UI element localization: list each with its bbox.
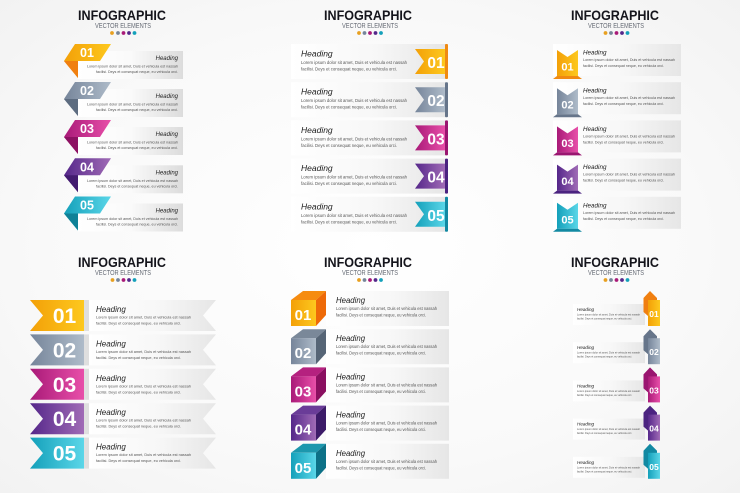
row 01: 01	[53, 305, 76, 328]
row 01: Heading	[156, 56, 179, 62]
row 05: 05	[53, 443, 76, 466]
row 01: 01	[427, 55, 445, 72]
row 01	[291, 291, 449, 326]
row 02	[64, 82, 183, 117]
row 05	[291, 444, 449, 479]
row 02	[291, 329, 449, 364]
row 04: Lorem ipsum dolor sit amet, Duis et vehicula est nassah	[336, 421, 438, 426]
row 04: Lorem ipsum dolor sit amet, Duis et vehicula est nassah	[583, 173, 675, 177]
row 02: 02	[53, 339, 76, 362]
row 01: 01	[649, 309, 659, 319]
row 04: facilisi. Deys et consequat neque, eu vehicula orci.	[577, 431, 632, 435]
row 03: Heading	[577, 383, 595, 388]
row 01: Heading	[583, 50, 607, 56]
row 02: Heading	[336, 334, 366, 343]
panel: infographic 4 (bottom left)	[30, 254, 216, 469]
panel: infographic 3 (top right)	[553, 7, 681, 232]
row 03: Heading	[156, 132, 179, 138]
row 05: Heading	[336, 449, 366, 458]
row 02: 02	[649, 347, 659, 357]
row 04: 04	[80, 160, 94, 174]
row 04	[30, 403, 216, 434]
row 01	[30, 300, 216, 331]
row 01: Lorem ipsum dolor sit amet, Duis et vehicula est nassah	[96, 314, 191, 320]
row 05	[64, 196, 183, 232]
row 05: Heading	[301, 201, 333, 211]
title 4: VECTOR ELEMENTS	[95, 270, 151, 277]
row 01: facilisi. Deys et consequat neque, eu vehicula orci.	[577, 316, 632, 320]
row 04: Lorem ipsum dolor sit amet, Duis et vehicula est nassah	[301, 175, 408, 180]
row 03: facilisi. Deys et consequat neque, eu vehicula orci.	[301, 143, 397, 148]
row 01: Heading	[577, 307, 595, 312]
row 03: Lorem ipsum dolor sit amet, Duis et vehicula est nassah	[96, 383, 191, 388]
row 02: Lorem ipsum dolor sit amet, Duis et vehicula est nassah	[577, 351, 640, 355]
row 05	[30, 438, 216, 469]
title 6: VECTOR ELEMENTS	[588, 270, 644, 277]
panel: infographic 1 (top left)	[64, 7, 183, 232]
row 05: Lorem ipsum dolor sit amet, Duis et vehicula est nassah	[583, 211, 675, 215]
row 03	[64, 120, 183, 155]
row 01: Lorem ipsum dolor sit amet, Duis et vehicula est nassah	[583, 58, 675, 62]
row 05	[553, 197, 681, 232]
row 01	[291, 44, 448, 79]
row 02: facilisi. Deys et consequat neque, eu vehicula orci.	[96, 108, 178, 112]
row 04: facilisi. Deys et consequat neque, eu vehicula orci.	[301, 181, 397, 186]
row 01	[553, 44, 681, 79]
row 01	[64, 44, 183, 79]
row 03: 03	[649, 385, 659, 395]
row 02: Heading	[301, 87, 333, 97]
row 02: facilisi. Deys et consequat neque, eu vehicula orci.	[577, 355, 632, 359]
title 2: INFOGRAPHIC	[324, 7, 412, 23]
row 03: facilisi. Deys et consequat neque, eu vehicula orci.	[96, 146, 178, 150]
row 04: Heading	[577, 422, 595, 427]
row 04	[553, 159, 681, 194]
row 05: facilisi. Deys et consequat neque, eu vehicula orci.	[336, 465, 426, 470]
row 05: Heading	[577, 460, 595, 465]
row 03: Lorem ipsum dolor sit amet, Duis et vehicula est nassah	[577, 389, 640, 393]
row 02: Lorem ipsum dolor sit amet, Duis et vehicula est nassah	[96, 349, 191, 354]
row 02: 02	[295, 345, 311, 362]
row 03	[291, 120, 448, 155]
title 3: VECTOR ELEMENTS	[588, 23, 644, 30]
row 05: 05	[80, 198, 94, 212]
row 01: 01	[561, 62, 574, 74]
title 1: VECTOR ELEMENTS	[95, 23, 151, 30]
row 05: Lorem ipsum dolor sit amet, Duis et vehicula est nassah	[301, 213, 408, 218]
row 03: Heading	[301, 125, 333, 135]
row 05: Heading	[156, 208, 179, 214]
row 01: facilisi. Deys et consequat neque, eu vehicula orci.	[96, 320, 181, 326]
row 02: facilisi. Deys et consequat neque, eu vehicula orci.	[96, 355, 181, 360]
row 04	[291, 406, 449, 441]
row 03: 03	[80, 122, 94, 136]
row 03	[553, 120, 681, 155]
row 04: facilisi. Deys et consequat neque, eu vehicula orci.	[583, 179, 664, 183]
row 03: Heading	[336, 372, 366, 381]
row 05: facilisi. Deys et consequat neque, eu vehicula orci.	[96, 222, 178, 226]
row 02: 02	[427, 93, 445, 110]
row 02: Lorem ipsum dolor sit amet, Duis et vehicula est nassah	[87, 102, 178, 106]
row 04	[64, 158, 183, 193]
row 02: Heading	[156, 94, 179, 100]
row 03	[291, 367, 449, 402]
title 3: INFOGRAPHIC	[571, 7, 659, 23]
row 02: facilisi. Deys et consequat neque, eu vehicula orci.	[336, 351, 426, 356]
title 6	[571, 254, 659, 282]
row 05: 05	[427, 208, 445, 225]
title 1: INFOGRAPHIC	[78, 7, 166, 23]
title 2: VECTOR ELEMENTS	[342, 23, 398, 30]
row 04: Lorem ipsum dolor sit amet, Duis et vehicula est nassah	[577, 427, 640, 431]
row 03	[30, 369, 216, 400]
row 03: Heading	[583, 126, 607, 133]
row 02: Lorem ipsum dolor sit amet, Duis et vehicula est nassah	[301, 98, 408, 103]
row 02: Lorem ipsum dolor sit amet, Duis et vehicula est nassah	[336, 344, 438, 349]
row 01: Heading	[301, 48, 333, 58]
row 01: 01	[295, 307, 311, 324]
row 04	[573, 406, 660, 441]
row 05: facilisi. Deys et consequat neque, eu vehicula orci.	[301, 219, 397, 224]
row 04: facilisi. Deys et consequat neque, eu vehicula orci.	[96, 424, 181, 429]
row 03: Lorem ipsum dolor sit amet, Duis et vehicula est nassah	[301, 136, 408, 141]
row 03	[573, 367, 660, 402]
row 03: Lorem ipsum dolor sit amet, Duis et vehicula est nassah	[336, 382, 438, 387]
row 02	[30, 334, 216, 365]
row 04: Heading	[301, 163, 333, 173]
row 01: Lorem ipsum dolor sit amet, Duis et vehicula est nassah	[336, 306, 438, 311]
row 05: Heading	[96, 443, 126, 452]
row 05: Heading	[583, 202, 607, 209]
row 01: 01	[80, 46, 94, 60]
row 01: Lorem ipsum dolor sit amet, Duis et vehicula est nassah	[87, 64, 178, 68]
row 05: facilisi. Deys et consequat neque, eu vehicula orci.	[96, 458, 181, 463]
row 02: 02	[561, 100, 574, 112]
row 01: facilisi. Deys et consequat neque, eu vehicula orci.	[96, 70, 178, 74]
row 02: Heading	[577, 345, 595, 350]
row 04: 04	[561, 176, 574, 188]
row 04: 04	[53, 408, 76, 431]
row 04: facilisi. Deys et consequat neque, eu vehicula orci.	[96, 184, 178, 188]
row 05: 05	[295, 460, 311, 477]
row 02	[291, 82, 448, 117]
row 01: Heading	[336, 296, 366, 305]
row 04: Heading	[336, 411, 366, 420]
panel: infographic 2 (top centre)	[291, 7, 448, 232]
row 05: Lorem ipsum dolor sit amet, Duis et vehicula est nassah	[336, 459, 438, 464]
row 05: Lorem ipsum dolor sit amet, Duis et vehicula est nassah	[87, 217, 178, 221]
row 03: facilisi. Deys et consequat neque, eu vehicula orci.	[583, 140, 664, 144]
row 03: Heading	[96, 374, 126, 383]
row 05: facilisi. Deys et consequat neque, eu vehicula orci.	[577, 469, 632, 473]
row 03: 03	[561, 138, 574, 150]
row 02	[553, 82, 681, 117]
row 03: facilisi. Deys et consequat neque, eu vehicula orci.	[336, 389, 426, 394]
row 05: facilisi. Deys et consequat neque, eu vehicula orci.	[583, 217, 664, 221]
row 02: 02	[80, 84, 94, 98]
row 03: Lorem ipsum dolor sit amet, Duis et vehicula est nassah	[583, 134, 675, 138]
title 6: INFOGRAPHIC	[571, 254, 659, 270]
row 03: 03	[295, 383, 311, 400]
row 05: Lorem ipsum dolor sit amet, Duis et vehicula est nassah	[96, 452, 191, 457]
row 04: Heading	[156, 170, 179, 176]
row 03: 03	[427, 131, 445, 148]
row 04: Heading	[583, 164, 607, 171]
row 04: 04	[427, 170, 445, 187]
title 4	[78, 254, 166, 282]
row 04: Lorem ipsum dolor sit amet, Duis et vehicula est nassah	[96, 418, 191, 423]
title 5: VECTOR ELEMENTS	[342, 270, 398, 277]
title 4: INFOGRAPHIC	[78, 254, 166, 270]
title 2	[324, 7, 412, 35]
title 3	[571, 7, 659, 35]
row 03: facilisi. Deys et consequat neque, eu vehicula orci.	[96, 389, 181, 394]
title 1	[78, 7, 166, 35]
row 04: 04	[649, 424, 659, 434]
row 05: 05	[561, 214, 574, 226]
row 02: facilisi. Deys et consequat neque, eu vehicula orci.	[301, 105, 397, 110]
title 5: INFOGRAPHIC	[324, 254, 412, 270]
title 5	[324, 254, 412, 282]
row 03: 03	[53, 374, 76, 397]
row 02: Heading	[96, 339, 126, 348]
row 02: Heading	[583, 88, 607, 95]
panel: infographic 5 (bottom centre)	[291, 254, 449, 479]
row 05	[291, 197, 448, 232]
row 05: Lorem ipsum dolor sit amet, Duis et vehicula est nassah	[577, 465, 640, 469]
row 01: facilisi. Deys et consequat neque, eu vehicula orci.	[301, 66, 397, 72]
row 03: Lorem ipsum dolor sit amet, Duis et vehicula est nassah	[87, 140, 178, 144]
row 05: 05	[649, 462, 659, 472]
row 02	[573, 329, 660, 364]
row 04: Lorem ipsum dolor sit amet, Duis et vehicula est nassah	[87, 179, 178, 183]
row 02: Lorem ipsum dolor sit amet, Duis et vehicula est nassah	[583, 96, 675, 100]
row 01: Lorem ipsum dolor sit amet, Duis et vehicula est nassah	[577, 312, 640, 316]
row 01: facilisi. Deys et consequat neque, eu vehicula orci.	[583, 64, 664, 68]
row 04	[291, 159, 448, 194]
row 02: facilisi. Deys et consequat neque, eu vehicula orci.	[583, 102, 664, 106]
row 05	[573, 444, 660, 479]
row 03: facilisi. Deys et consequat neque, eu vehicula orci.	[577, 393, 632, 397]
row 01: facilisi. Deys et consequat neque, eu vehicula orci.	[336, 312, 426, 318]
row 04: facilisi. Deys et consequat neque, eu vehicula orci.	[336, 427, 426, 432]
row 04: 04	[295, 422, 312, 439]
row 01: Heading	[96, 305, 126, 314]
row 01	[573, 291, 660, 326]
row 04: Heading	[96, 408, 126, 417]
panel: infographic 6 (bottom right)	[571, 254, 660, 479]
row 01: Lorem ipsum dolor sit amet, Duis et vehicula est nassah	[301, 60, 408, 65]
